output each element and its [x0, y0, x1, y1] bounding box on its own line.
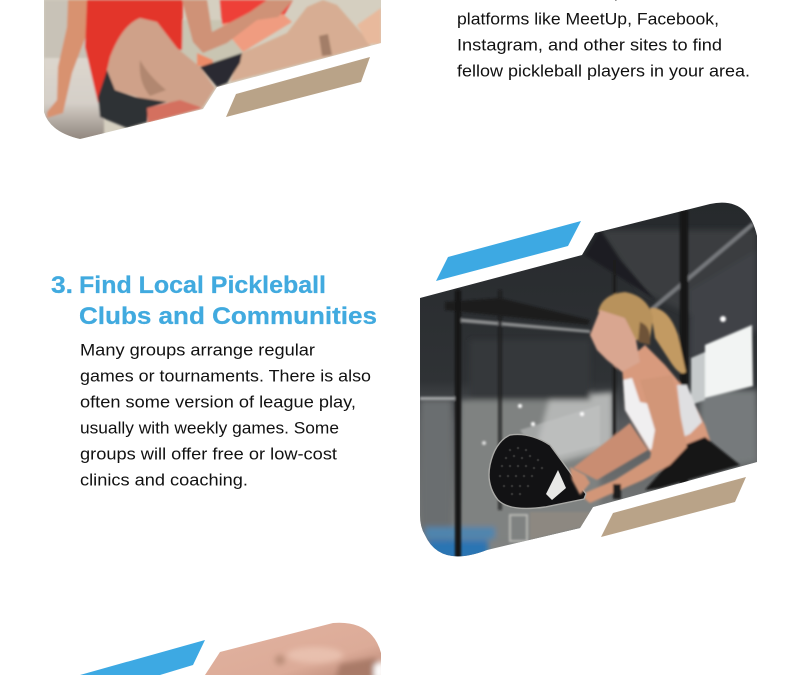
- heading: section 3: Clubs and Communities: [79, 303, 377, 330]
- text block: intro continuation: platforms like MeetUp, Facebook,: [457, 10, 719, 28]
- accent bar: tan, photo 1: [226, 57, 370, 117]
- accent bar: tan, photo 2: [601, 477, 746, 537]
- heading: section 3: 3.: [51, 272, 73, 299]
- black pants: [645, 437, 740, 490]
- ponytail and hair: [650, 308, 686, 373]
- neck and torso: [622, 345, 710, 452]
- right arm: [584, 402, 689, 504]
- sports top: [622, 376, 656, 451]
- text block: section 3 body: clinics and coaching.: [80, 472, 248, 490]
- text block: intro continuation: Instagram, and other sites to find: [457, 36, 722, 54]
- text block: section 3 body: Many groups arrange regular: [80, 342, 316, 360]
- photo: woman playing padel: [420, 200, 757, 560]
- photo: section 4 skin close-up: [205, 620, 385, 675]
- face: [590, 310, 640, 372]
- heading: section 3: [51, 272, 377, 330]
- accent bar: blue, photo 2: [436, 221, 581, 281]
- photo: seated players stretching: [44, 0, 381, 140]
- text block: intro continuation: fellow pickleball players in your area.: [457, 62, 750, 80]
- text block: section 3 body: [80, 342, 371, 490]
- text block: section 3 body: groups will offer free or low-cost: [80, 446, 337, 464]
- text block: section 3 body: usually with weekly games. Some: [80, 420, 339, 438]
- heading: section 3: Find Local Pickleball: [79, 272, 326, 299]
- text block: section 3 body: often some version of league play,: [80, 394, 356, 412]
- accent bar: blue, section 4: [80, 640, 205, 675]
- hand on racket: [570, 467, 590, 495]
- text block: section 3 body: games or tournaments. There is also: [80, 368, 371, 386]
- left arm: [573, 423, 648, 480]
- text block: intro continuation: [457, 0, 750, 80]
- padel racket: [489, 434, 586, 508]
